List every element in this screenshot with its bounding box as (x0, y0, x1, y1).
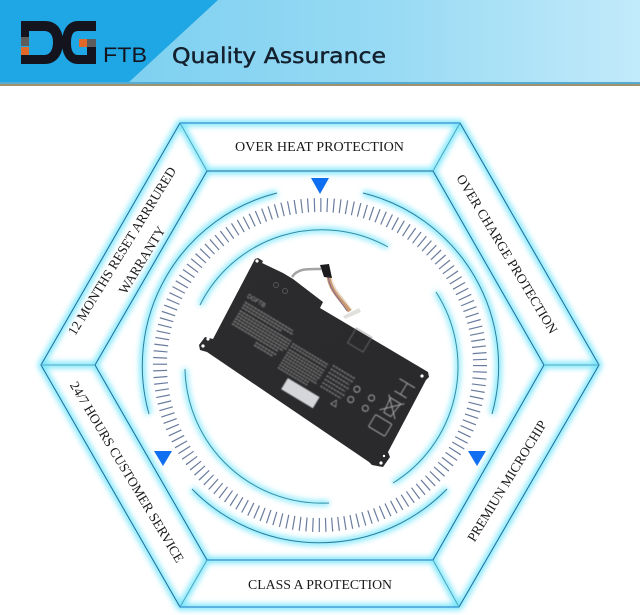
logo: DG FTB: FTB (103, 44, 147, 67)
tick ring (160, 205, 480, 525)
inner arcs (185, 230, 458, 503)
label: customer service: 24/7 HOURS CUSTOMER SERVICE (67, 379, 187, 565)
label: warranty: 12 MONTHS RESET ARRRURED (65, 164, 179, 338)
label: over charge protection: OVER CHARGE PROTECTION (453, 172, 561, 337)
battery body (199, 258, 429, 467)
battery label details: DGFTB (246, 294, 266, 309)
battery label details (215, 272, 426, 448)
hexagon frame (41, 123, 599, 607)
logo: DG FTB (21, 21, 147, 67)
label: over heat protection: OVER HEAT PROTECTION (235, 140, 404, 155)
triangle marker: left (154, 451, 172, 466)
triangle marker: right (468, 451, 486, 466)
heading: Quality Assurance: Quality Assurance (172, 44, 386, 68)
battery cable (292, 264, 361, 319)
triangle marker: top (311, 178, 329, 194)
label: warranty: WARRANTY (116, 223, 169, 297)
label: premium microchip: PREMIUN MICROCHIP (464, 418, 550, 544)
outer arcs (142, 193, 499, 543)
header banner (0, 0, 640, 86)
battery product photo (199, 258, 429, 467)
label: class a protection: CLASS A PROTECTION (248, 578, 392, 593)
